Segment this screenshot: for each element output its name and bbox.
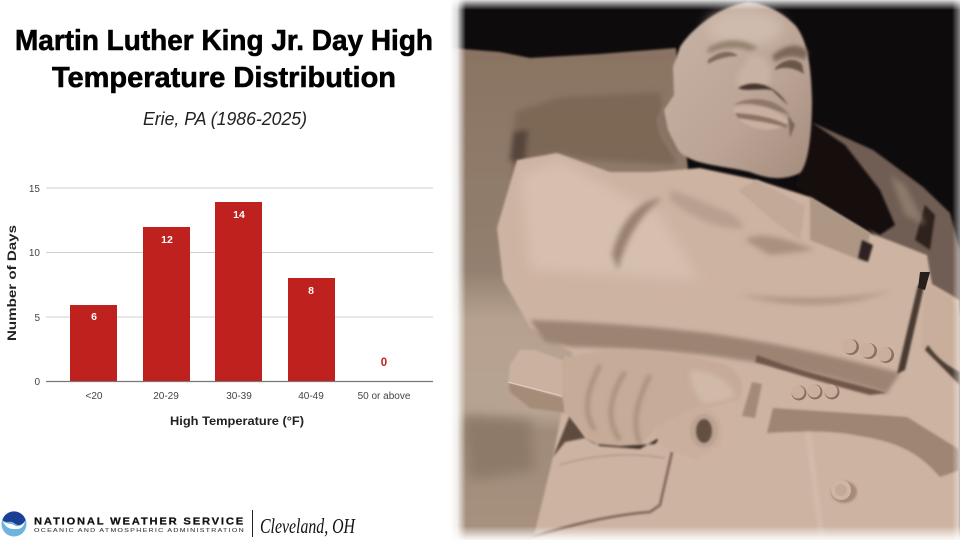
bar value labels <box>91 209 387 369</box>
photo edge fades <box>450 0 960 540</box>
sleeve folds <box>612 198 662 270</box>
baseline <box>46 380 433 382</box>
collar and tie <box>738 180 805 240</box>
rock on right side of statue <box>813 123 960 300</box>
y axis labels <box>29 184 40 388</box>
icon: NOAA logo <box>2 511 26 536</box>
title <box>15 25 433 94</box>
x axis labels: <20 <box>86 391 103 402</box>
bar value labels: 8 <box>308 285 314 297</box>
y axis labels: 0 <box>34 377 40 388</box>
y axis title: Number of Days <box>5 225 19 341</box>
y axis labels: 5 <box>34 313 40 324</box>
footer: National Weather Service branding <box>2 510 356 538</box>
shoulder highlight <box>523 164 691 278</box>
bars <box>70 202 335 381</box>
lower sleeve dark <box>767 408 960 477</box>
statue head <box>656 2 812 178</box>
night sky background <box>450 0 960 540</box>
statue torso and arms <box>497 153 960 540</box>
upper arm underside shadow <box>530 320 900 393</box>
upper cuff buttons <box>842 338 894 363</box>
nose <box>738 57 770 84</box>
x axis labels <box>86 391 411 402</box>
far right hand <box>958 312 960 378</box>
x axis labels: 50 or above <box>358 391 411 402</box>
forehead highlight <box>707 10 783 46</box>
title: Temperature Distribution <box>52 62 396 94</box>
x axis labels: 20-29 <box>153 391 179 402</box>
rock wall behind statue <box>450 48 690 540</box>
x axis title: High Temperature (°F) <box>170 414 304 428</box>
scroll and paper left of hand <box>508 350 567 397</box>
cuff shadow <box>897 285 924 374</box>
bar chart: number of days by high temperature <box>5 184 433 428</box>
jacket button <box>831 481 857 503</box>
fist <box>562 350 742 445</box>
lips <box>733 106 788 130</box>
gridlines <box>46 188 433 317</box>
subtitle: Erie, PA (1986-2025) <box>143 109 307 129</box>
divider <box>252 510 254 537</box>
eyes <box>708 52 738 64</box>
bar value labels: 6 <box>91 311 97 323</box>
agency name: NATIONAL WEATHER SERVICE <box>34 516 245 528</box>
x axis labels: 30-39 <box>226 391 252 402</box>
office location: Cleveland, OH <box>260 514 356 538</box>
bar value labels: 12 <box>161 234 173 246</box>
upper lip shadow <box>733 99 790 115</box>
bar value labels: 0 <box>381 357 387 369</box>
y axis labels: 10 <box>29 248 40 259</box>
brows <box>708 40 758 54</box>
x axis labels: 40-49 <box>298 391 324 402</box>
jacket front seam <box>808 431 821 526</box>
jacket pocket and flap <box>533 452 672 537</box>
title: Martin Luther King Jr. Day High <box>15 25 433 57</box>
cuff opening under hand <box>742 382 762 418</box>
lower cuff buttons <box>792 384 840 400</box>
y axis labels: 15 <box>29 184 40 195</box>
rolled end of scroll <box>656 436 662 442</box>
photo: Martin Luther King Jr. memorial statue <box>450 0 960 540</box>
agency subtitle: OCEANIC AND ATMOSPHERIC ADMINISTRATION <box>34 528 245 534</box>
bar value labels: 14 <box>233 209 245 221</box>
